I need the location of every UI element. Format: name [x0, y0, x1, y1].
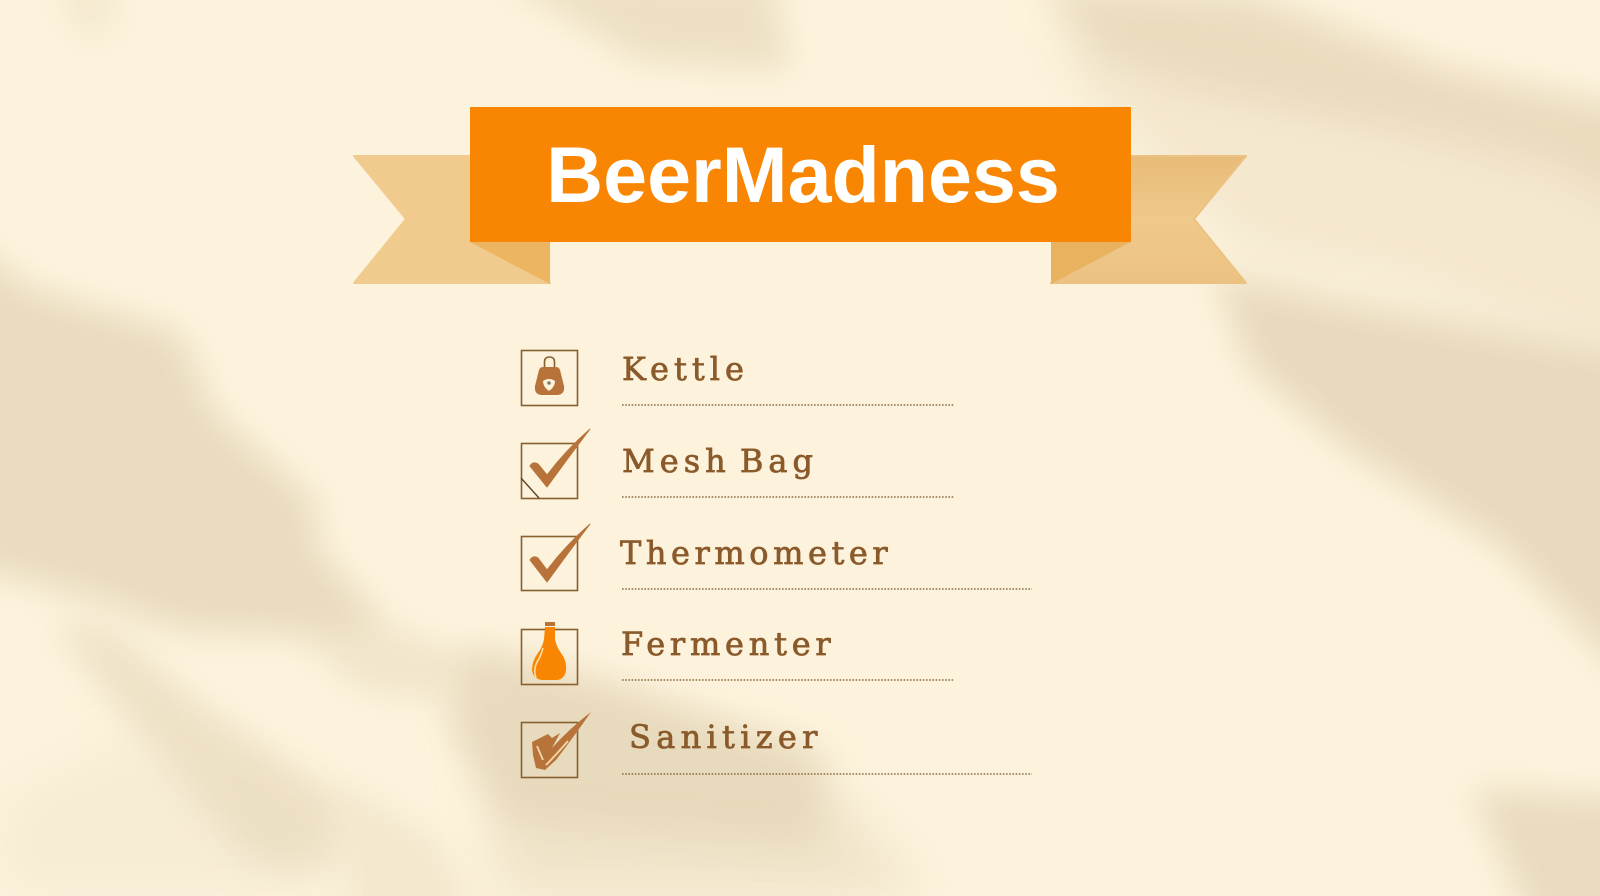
item: Mesh Bag	[521, 429, 954, 498]
icon: check box	[521, 429, 590, 498]
title: BeerMadness	[546, 130, 1060, 219]
left ribbon tail	[354, 156, 550, 283]
label: Thermometer: Thermometer	[620, 534, 892, 572]
label: Sanitizer: Sanitizer	[629, 718, 823, 756]
item: Fermenter	[522, 622, 954, 684]
left ribbon fold	[470, 242, 550, 284]
label: Mesh Bag: Mesh Bag	[622, 442, 818, 480]
label: Fermenter: Fermenter	[621, 625, 835, 663]
right ribbon fold	[1051, 242, 1130, 284]
label: Kettle: Kettle	[622, 350, 749, 388]
item: Kettle	[522, 350, 954, 406]
orange banner	[470, 107, 1131, 242]
icon: kettle	[522, 350, 578, 406]
item: Thermometer	[522, 524, 1032, 590]
icon: check box	[522, 524, 590, 590]
item: Sanitizer	[522, 712, 1032, 778]
icon: sanitizer check	[522, 712, 591, 778]
right ribbon tail	[1051, 156, 1246, 283]
icon: flask	[522, 622, 578, 684]
